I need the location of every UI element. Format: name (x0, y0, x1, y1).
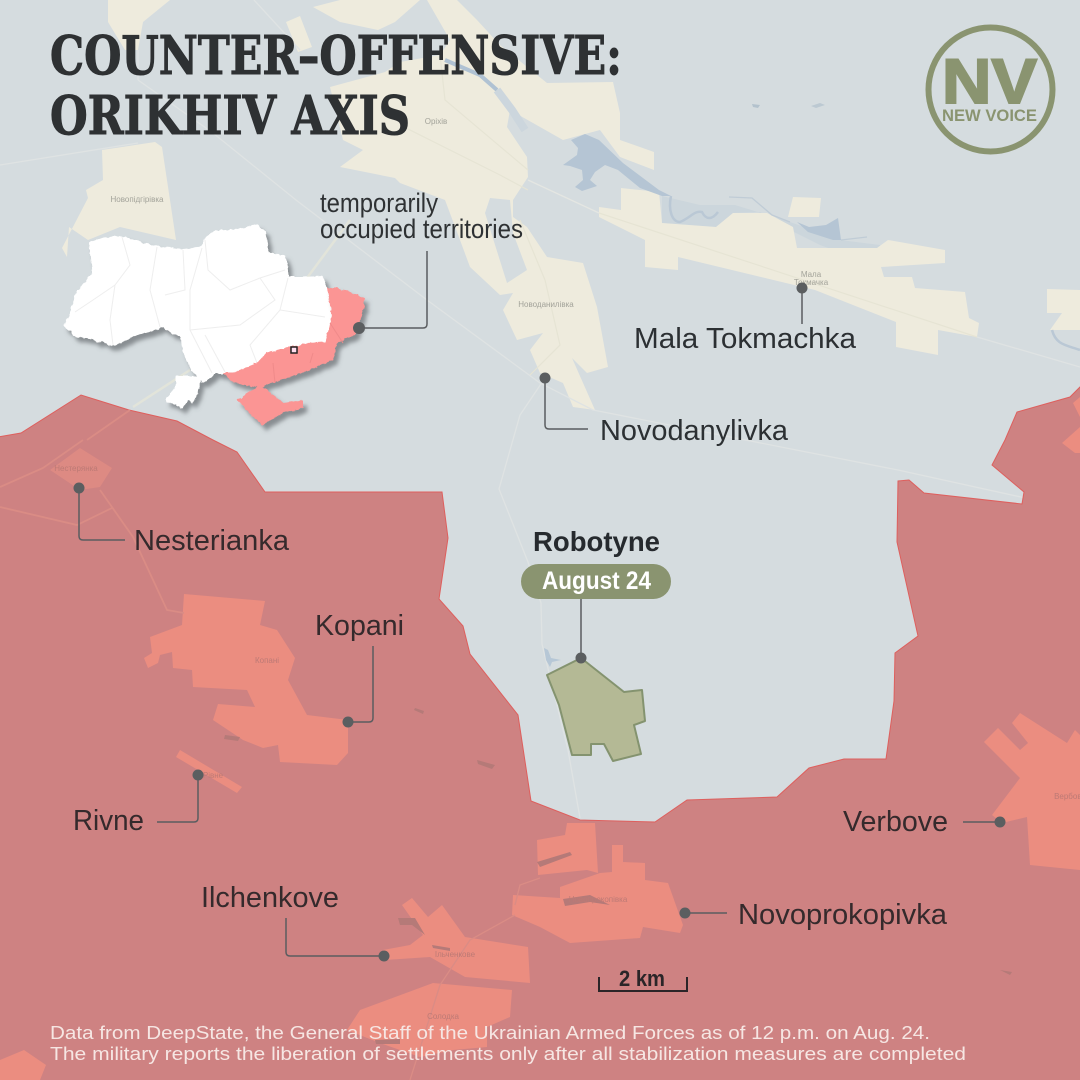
logo: NV New Voice: NV (942, 47, 1037, 117)
logo: NV New Voice: NEW VOICE (942, 106, 1037, 125)
label: Rivne (73, 770, 204, 837)
occupied territory on inset (223, 287, 365, 425)
map labels in Cyrillic: Нестерянка (54, 464, 98, 473)
callout: Robotyne, August 24: Robotyne (533, 526, 660, 557)
callout: Robotyne, August 24 (521, 526, 671, 664)
free territory (65, 225, 332, 407)
label: Kopani: Kopani (315, 610, 404, 642)
liberated settlement: Robotyne (547, 658, 645, 761)
map labels in Cyrillic: Копані (255, 656, 279, 665)
label: Kopani (315, 610, 404, 728)
label: temporarily occupied territories (320, 188, 523, 244)
oblast borders (75, 237, 325, 373)
map labels in Cyrillic (54, 117, 1080, 1021)
map labels in Cyrillic: Ільченкове (435, 950, 476, 959)
map labels in Cyrillic: Оріхів (425, 117, 447, 126)
scale bar: 2 km: 2 km (619, 966, 665, 991)
callout: Robotyne, August 24: August 24 (542, 567, 651, 595)
leader: occupied territories (353, 251, 427, 334)
label: Nesterianka: Nesterianka (134, 525, 290, 557)
map: settlements outside the red zone (62, 0, 1080, 410)
source note (50, 1022, 966, 1064)
label: Verbove: Verbove (843, 806, 948, 838)
label: Novodanylivka: Novodanylivka (600, 415, 789, 447)
map labels in Cyrillic: Токмачка (794, 278, 829, 287)
map: roads (0, 0, 1080, 818)
map labels in Cyrillic: Мала (801, 270, 822, 279)
scale bar: 2 km (599, 966, 687, 991)
map labels in Cyrillic: Новопрокопівка (569, 895, 628, 904)
source note: The military reports the liberation of settlements only after all stabilization measures are completed (50, 1043, 966, 1064)
title: COUNTER–OFFENSIVE: (50, 25, 622, 87)
map labels in Cyrillic: Новопідгірівка (111, 195, 164, 204)
label: temporarily occupied territories: temporarily (320, 188, 438, 218)
roads and spots in the occupied zone (0, 410, 1012, 1080)
settlements inside the occupied zone (0, 397, 1080, 1080)
inset map of Ukraine (65, 225, 365, 425)
marker: area of the map (291, 347, 297, 353)
borders inside the occupied territory (273, 323, 343, 383)
map labels in Cyrillic: Рівне (203, 771, 224, 780)
map labels in Cyrillic: Новоданилівка (518, 300, 574, 309)
occupied zone on the map (0, 385, 1080, 1080)
label: Mala Tokmachka: Mala Tokmachka (634, 323, 857, 355)
label: Ilchenkove (201, 882, 390, 962)
title: ORIKHIV AXIS (50, 85, 410, 147)
label: Novoprokopivka: Novoprokopivka (738, 899, 948, 931)
logo: NV New Voice (928, 28, 1052, 152)
label: Novodanylivka (540, 372, 789, 447)
source note: Data from DeepState, the General Staff of the Ukrainian Armed Forces as of 12 p.m. on Aug. 24. (50, 1022, 930, 1043)
label: Ilchenkove: Ilchenkove (201, 882, 339, 914)
label: Mala Tokmachka (634, 282, 857, 355)
map labels in Cyrillic: Солодка (427, 1012, 459, 1021)
label: temporarily occupied territories: occupied territories (320, 214, 523, 244)
label: Verbove (843, 806, 1006, 838)
map: water bodies (445, 60, 1080, 667)
title (50, 25, 622, 147)
label: Rivne: Rivne (73, 805, 144, 837)
label: Nesterianka (74, 482, 290, 557)
map labels in Cyrillic: Роботине (585, 695, 621, 704)
